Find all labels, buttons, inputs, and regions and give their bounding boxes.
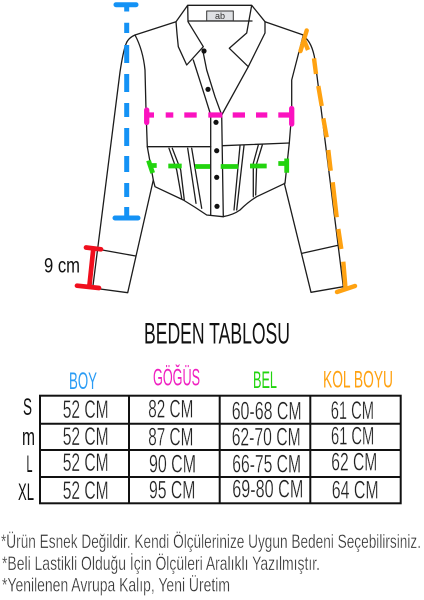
cuff label: 9 cm — [44, 254, 80, 278]
row L: 62 CM — [331, 449, 377, 477]
column headers: BEL — [253, 367, 277, 394]
row S: 52 CM — [63, 396, 109, 424]
row S — [63, 396, 374, 426]
right sleeve and cuff — [284, 37, 343, 292]
placket — [193, 53, 248, 217]
neck label: ab — [215, 11, 225, 21]
row L: 52 CM — [63, 449, 109, 477]
row M — [63, 422, 374, 452]
measure: sleeve (orange) — [300, 30, 355, 292]
size table grid — [40, 396, 401, 503]
row XL — [63, 476, 379, 505]
waist seam — [147, 143, 289, 147]
footnotes — [1, 532, 421, 597]
footnotes: *Yenilenen Avrupa Kalıp, Yeni Üretim — [2, 576, 230, 597]
size labels: L — [26, 451, 32, 478]
measure: chest (pink) — [147, 108, 292, 124]
row XL: 69-80 CM — [232, 476, 303, 504]
footnotes: *Beli Lastikli Olduğu İçin Ölçüleri Aralıklı Yazılmıştır. — [2, 554, 320, 575]
neck label — [207, 11, 233, 21]
left sleeve and cuff — [93, 35, 153, 293]
row S: 60-68 CM — [232, 398, 302, 426]
size labels — [18, 394, 35, 506]
row M: 62-70 CM — [232, 423, 301, 451]
row M: 87 CM — [148, 424, 193, 452]
measure: cuff (red) — [77, 248, 101, 288]
row S: 82 CM — [148, 396, 193, 424]
row L: 66-75 CM — [232, 450, 301, 478]
corset boning — [169, 145, 262, 210]
collar — [176, 5, 265, 67]
row XL: 95 CM — [149, 476, 195, 504]
row S: 61 CM — [331, 397, 374, 425]
row XL: 52 CM — [63, 477, 109, 505]
title: BEDEN TABLOSU — [144, 317, 290, 350]
row M: 61 CM — [331, 422, 374, 450]
size labels: XL — [18, 479, 34, 506]
buttons — [201, 48, 220, 209]
row M: 52 CM — [63, 423, 109, 451]
column headers — [69, 364, 393, 395]
column headers: BOY — [69, 368, 97, 395]
shirt line drawing — [93, 5, 343, 293]
row XL: 64 CM — [332, 476, 379, 504]
measure: length (blue) — [115, 5, 138, 218]
shirt body outline — [135, 22, 303, 217]
size labels: m — [22, 424, 35, 451]
row L: 90 CM — [149, 450, 196, 478]
table values — [63, 396, 379, 505]
measure: waist (green) — [148, 158, 287, 173]
column headers: GÖĞÜS — [153, 364, 200, 392]
size labels: S — [23, 394, 32, 421]
row L — [63, 449, 377, 478]
